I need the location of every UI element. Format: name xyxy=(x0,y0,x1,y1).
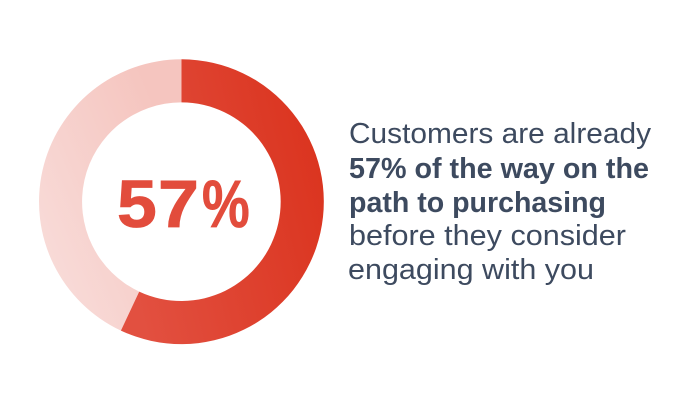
donut chart xyxy=(39,59,324,344)
center percentage: 7 xyxy=(158,166,199,241)
statement text: before they consider xyxy=(349,220,626,252)
remaining 43% segment xyxy=(39,59,182,331)
statement text: path to purchasing xyxy=(349,187,606,219)
center percentage: 5 xyxy=(117,166,157,241)
statement text xyxy=(348,118,652,286)
center percentage xyxy=(117,166,250,241)
center percentage: % xyxy=(202,166,250,241)
statement text: engaging with you xyxy=(348,254,594,286)
statement text: Customers are already xyxy=(349,118,652,150)
statement text: 57% of the way on the xyxy=(349,153,649,185)
57% segment xyxy=(121,59,324,344)
